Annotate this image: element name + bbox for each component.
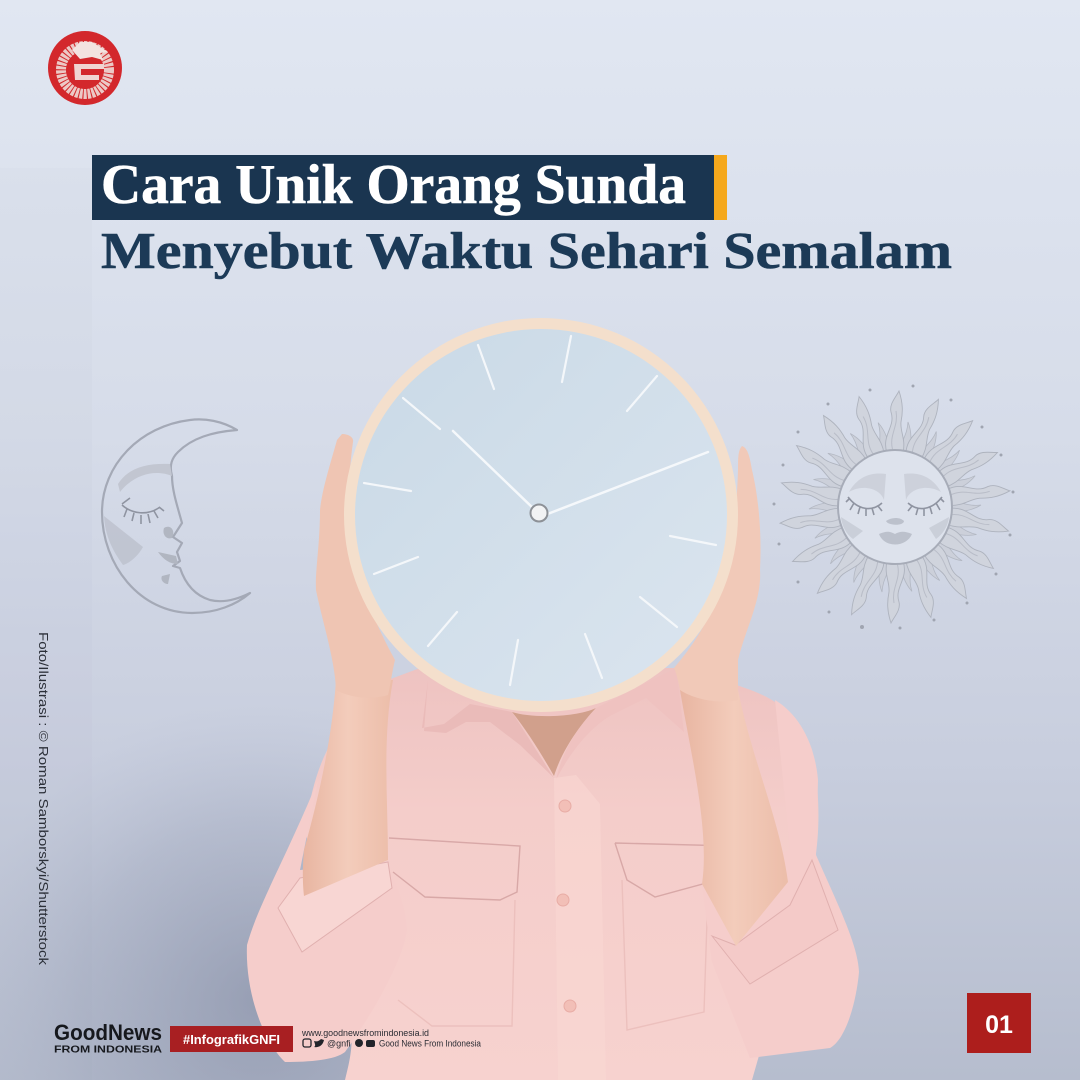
right forearm [680,690,788,946]
sun cheeks [841,517,949,539]
sun nose and mouth [879,518,912,544]
footer branding [54,1020,481,1056]
right cuff fold [712,860,838,984]
left cuff fold [278,862,392,952]
sun rays [779,391,1011,623]
shirt buttons [557,800,576,1012]
clock hour ticks [364,336,716,685]
clock hands [453,431,708,515]
social icons and handles [303,1038,481,1048]
hashtag tag [170,1026,293,1052]
sun stars [772,384,1014,630]
footer branding: #InfografikGNFI [183,1033,280,1047]
moon nose and lips [158,527,178,584]
photo credit: Foto/Ilustrasi : © Roman Samborskyi/Shutterstock [36,632,50,966]
right pocket [615,843,735,1030]
title line 1: Cara Unik Orang Sunda [101,154,686,216]
button placket [554,775,606,1080]
clock center pin [530,504,548,522]
sun illustration [772,384,1014,630]
moon cheek hatching [104,516,143,565]
logo: GNFI dragon emblem [48,31,122,105]
sun face [838,450,952,564]
clock face [355,329,727,701]
moon eyebrow [118,464,172,492]
page number badge [967,993,1031,1053]
brand subtitle: FROM INDONESIA [54,1044,162,1056]
neck opening [512,708,596,776]
left forearm [303,680,393,896]
website: www.goodnewsfromindonesia.id [301,1028,429,1038]
person in pink shirt [247,434,859,1080]
moon illustration [102,419,250,613]
moon eyelashes [122,498,164,524]
sun brows [849,474,941,500]
title highlight bar [92,155,714,220]
sun eyelashes [846,497,944,516]
right collar [556,668,684,780]
shirt body [305,668,818,1080]
left pocket [389,838,520,1026]
right hand [674,446,761,702]
title line 2: Menyebut Waktu Sehari Semalam [101,223,952,280]
left collar [422,680,554,778]
left hand [316,434,395,698]
brand name: GoodNews [54,1020,162,1045]
left sleeve [247,780,407,1062]
right sleeve [702,700,859,1058]
social icons and handles: @gnfi [327,1038,351,1048]
wall clock [344,318,738,712]
title banner [92,154,952,280]
clock wooden frame [344,318,738,712]
social icons and handles: Good News From Indonesia [379,1038,481,1048]
page number badge: 01 [985,1011,1013,1039]
title accent bar [714,155,727,220]
